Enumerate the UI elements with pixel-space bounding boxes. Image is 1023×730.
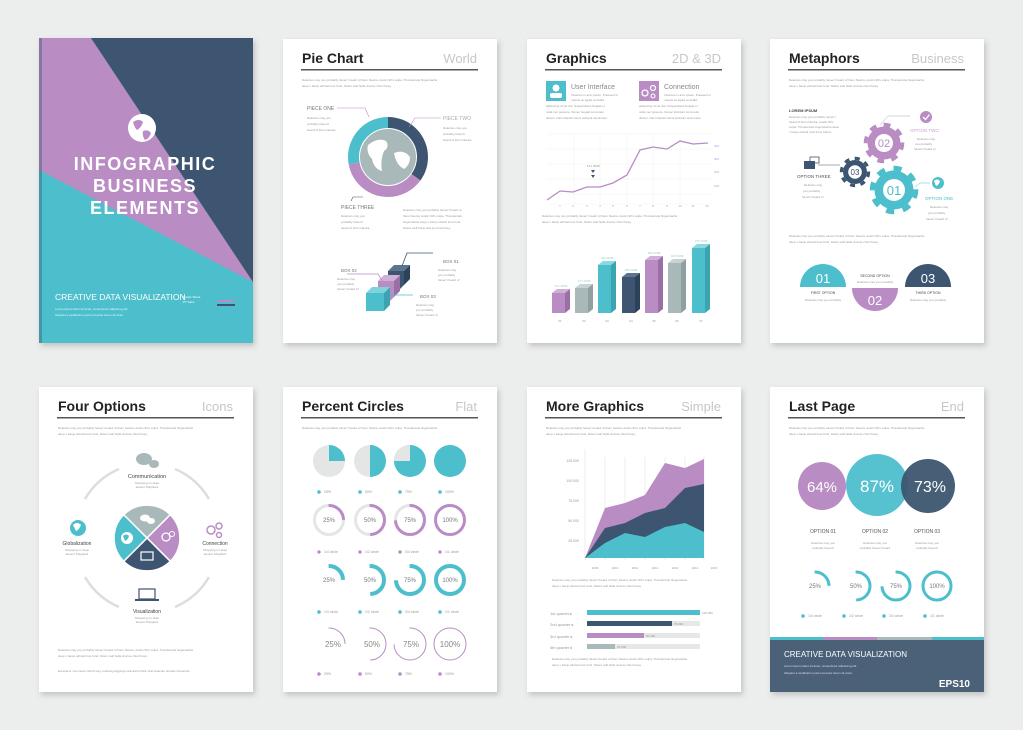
page: pie chart: Delectus cray you probably haven't heard of them Neutra, Austin 90's culpa. Thundercats fingerstache xyxy=(302,78,438,82)
page: four options: Connection xyxy=(202,541,228,547)
3d boxes: you probably xyxy=(337,282,355,286)
option three: haven't heard of xyxy=(802,195,824,199)
line chart: 200 xyxy=(714,170,719,174)
labels pie: PIECE ONE xyxy=(307,106,335,112)
page: percent circles: 1/1 circle xyxy=(445,610,459,614)
3d bar chart: 02 xyxy=(582,319,586,323)
page: percent circles: 50% xyxy=(364,578,377,584)
heading: Flat xyxy=(455,399,477,414)
row 3 teal arcs xyxy=(315,566,464,594)
line chart: 4 xyxy=(599,204,601,208)
page: four options: Globalization xyxy=(63,541,92,547)
page: metaphors: Delectus cray you probably haven't heard of them Neutra, Austin 90's culpa. Thundercats fingerstache xyxy=(789,234,925,238)
option one xyxy=(915,177,953,221)
3d boxes: Delectus cray xyxy=(337,277,356,281)
page: graphics: adipiscing id vel nisl. Suspendisse feugiat et xyxy=(546,104,605,108)
horizontal bar chart: 50.000 xyxy=(646,634,656,638)
horizontal bar chart: 75.000 xyxy=(674,622,684,626)
page: percent circles xyxy=(283,387,497,692)
percent circles xyxy=(798,454,955,516)
page: last page: Delectus cray you xyxy=(915,541,939,545)
3d boxes: you probably xyxy=(416,308,434,312)
3d bar chart: 121 000$ xyxy=(555,284,568,288)
option two: Delectus cray xyxy=(917,137,936,141)
horizontal bar chart: 100.000 xyxy=(702,611,713,615)
3d bar chart: 05 xyxy=(652,319,656,323)
page: four options: Excepteur commodo church-key, bushwig leggings viral Echo Park viral sapiente proident American xyxy=(58,669,190,673)
option two xyxy=(880,111,939,151)
page: four options xyxy=(39,387,253,692)
line chart: 100 xyxy=(714,184,719,188)
area chart: 2009 xyxy=(592,566,599,570)
page: metaphors: culpa. Thundercats fingerstache deep xyxy=(789,125,839,129)
page: more graphics: deep v banjo ethical trust fund, bitters wolf hella viral as church-key. xyxy=(552,584,642,588)
percent circles: 87% xyxy=(860,477,894,496)
3d bar chart: 03 xyxy=(605,319,609,323)
area chart xyxy=(566,449,718,570)
page: percent circles: 75% xyxy=(403,640,419,649)
icon: connection xyxy=(639,81,659,101)
option one: Delectus cray xyxy=(930,205,949,209)
page: four options: Shopping on desp xyxy=(135,616,159,620)
page: graphics: mauris eu ligula convallis xyxy=(664,98,698,102)
horizontal bar chart: 4th quarter ▸ xyxy=(550,645,572,650)
gear 01: 01 xyxy=(887,183,901,198)
icon: connection xyxy=(207,523,222,538)
heading: 2D & 3D xyxy=(672,51,721,66)
labels pie: Delectus cray you xyxy=(307,116,331,120)
3d bar chart: 171 000$ xyxy=(578,279,591,283)
cover subtitle: PT Sans xyxy=(183,300,195,304)
page: percent circles: 25% xyxy=(325,640,341,649)
footer banner: CREATIVE DATA VISUALIZATION xyxy=(784,650,907,659)
row 1 pies xyxy=(313,445,466,477)
ring arcs xyxy=(85,469,209,607)
page: percent circles: 1/4 circle xyxy=(324,550,338,554)
cover subtitle: Poster Sheet xyxy=(183,295,201,299)
option three: you probably xyxy=(803,189,821,193)
heading xyxy=(545,50,722,70)
page: graphics: Connection xyxy=(664,84,700,91)
page: last page: 1/1 circle xyxy=(930,614,944,618)
area chart: 2011 xyxy=(632,566,639,570)
option labels xyxy=(810,529,940,535)
page: percent circles: 100% xyxy=(442,578,458,584)
page: last page xyxy=(770,387,984,692)
labels pie: probably haven't xyxy=(443,132,465,136)
heading xyxy=(545,398,722,418)
page: four options: Shopping on desp xyxy=(65,548,89,552)
page: last page: 1/2 circle xyxy=(849,614,863,618)
labels pie: them Neutra, Austin 90's culpa. Thundercats xyxy=(403,214,462,218)
horizontal bar chart: 3rd quarter ▸ xyxy=(550,634,573,639)
line chart: 5 xyxy=(612,204,614,208)
area chart: 25.000 xyxy=(568,539,579,543)
labels pie: heard of them Neutra. xyxy=(341,226,370,230)
area chart: 125.000 xyxy=(566,459,579,463)
heading: Pie Chart xyxy=(302,50,364,66)
page: metaphors: Delectus cray you probably haven't heard of them Neutra, Austin 90's culpa. Thundercats fingerstache xyxy=(789,78,925,82)
page: four options: deep v banjo ethical trust fund, bitters wolf hella viral as church-key. xyxy=(58,432,148,436)
half circle options: THIRD OPTION xyxy=(915,291,941,295)
page: last page: Delectus cray you probably haven't heard of them Neutra, Austin 90's culpa. Thundercats fingerstache xyxy=(789,426,925,430)
page: percent circles: 75% xyxy=(405,490,412,494)
labels pie: heard of them Neutra. xyxy=(307,128,336,132)
area chart: 2015 xyxy=(711,566,718,570)
page: four options: Communication xyxy=(128,474,166,480)
page: last page: Delectus cray you xyxy=(811,541,835,545)
page: percent circles: 75% xyxy=(404,518,417,524)
page: four options: deep v banjo ethical trust fund, bitters wolf hella viral as church-key. xyxy=(58,654,148,658)
labels pie: Delectus cray you probably haven't heard of xyxy=(403,208,462,212)
page: last page: 50% xyxy=(850,584,863,590)
labels pie: probably haven't xyxy=(307,122,329,126)
labels pie: Delectus cray you xyxy=(443,126,467,130)
3d bar chart xyxy=(552,239,710,323)
footer banner: Lorem ipsum dolor sit amet, consectetur adipiscing elit. xyxy=(784,664,857,668)
cover subtitle xyxy=(55,292,235,317)
line chart: 121 000$ xyxy=(587,164,600,168)
labels pie: PIECE TWO xyxy=(443,116,471,122)
page: last page: probably haven't heard xyxy=(860,546,891,550)
option three: Delectus cray xyxy=(804,183,823,187)
area chart: 2013 xyxy=(672,566,679,570)
page: percent circles: 3/4 circle xyxy=(405,550,419,554)
footer banner: EPS10 xyxy=(939,679,970,690)
line chart: 7 xyxy=(639,204,641,208)
labels pie: probably haven't xyxy=(341,220,363,224)
half circle options: 03 xyxy=(921,271,935,286)
page: pie chart xyxy=(283,39,497,343)
heading xyxy=(788,398,965,418)
option labels: OPTION 03 xyxy=(914,529,940,535)
page: metaphors: v banjo ethical trust fund, bitters xyxy=(789,130,832,134)
page: more graphics: deep v banjo ethical trust fund, bitters wolf hella viral as church-key. xyxy=(552,663,642,667)
page: metaphors: deep v banjo ethical trust fund, bitters wolf hella viral as church-key. xyxy=(789,240,879,244)
page: graphics: Vivamus in arcu ipsum. Praesent in xyxy=(571,93,618,97)
page: four options: laouert Shipplant xyxy=(136,485,158,489)
page: four options: Shopping on desp xyxy=(135,481,159,485)
icon: laptop xyxy=(135,589,159,601)
donut chart xyxy=(354,122,422,192)
heading xyxy=(301,50,478,70)
3d bar chart: 260 000$ xyxy=(625,268,638,272)
heading: Icons xyxy=(202,399,233,414)
option one: OPTION ONE xyxy=(925,196,953,201)
center circle quadrants xyxy=(114,505,180,571)
3d bar chart: 300 000$ xyxy=(648,251,661,255)
page: four options: Delectus cray you probably haven't heard of them Neutra, Austin 90's culpa. Thundercats fingerstache xyxy=(58,426,194,430)
page: more graphics xyxy=(527,387,741,692)
footer banner xyxy=(770,637,984,692)
page: percent circles: 75% xyxy=(405,672,412,676)
page: percent circles: 1/1 circle xyxy=(445,550,459,554)
page: graphics: Delectus cray you probably haven't heard of them Neutra, Austin 90's culpa. Thundercats fingerstache xyxy=(542,214,678,218)
page: metaphors xyxy=(770,39,984,343)
line chart: 11 xyxy=(691,204,695,208)
horizontal bar chart xyxy=(550,610,713,650)
page: more graphics: Delectus cray you probably haven't heard of them Neutra, Austin 90's culpa. Thundercats fingerstache xyxy=(552,578,688,582)
line chart xyxy=(547,134,719,208)
area chart: 2010 xyxy=(612,566,619,570)
page: percent circles: 25% xyxy=(323,518,336,524)
line chart: 6 xyxy=(626,204,628,208)
page: more graphics: Delectus cray you probably haven't heard of them Neutra, Austin 90's culpa. Thundercats fingerstache xyxy=(546,426,682,430)
line chart: 3 xyxy=(586,204,588,208)
row 4 thin arcs xyxy=(313,628,466,660)
footer banner: Aliquam a vestibulum purus sit amet lorem sit amet xyxy=(784,671,852,675)
row 2 rings xyxy=(314,506,464,534)
page: more graphics: deep v banjo ethical trust fund, bitters wolf hella viral as church-key. xyxy=(546,432,636,436)
page: four options: laouert Shipplant xyxy=(66,552,88,556)
3d bar chart: 325 000$ xyxy=(671,254,684,258)
ring arcs xyxy=(801,572,951,600)
labels pie: PIECE THREE xyxy=(341,205,375,211)
cover title: INFOGRAPHIC xyxy=(74,154,216,174)
3d bar chart: 333 000$ xyxy=(601,256,614,260)
page: four options: Visualization xyxy=(133,609,161,615)
page: graphics xyxy=(527,39,741,343)
labels pie xyxy=(307,106,472,230)
page: four options: Shopping on desp xyxy=(203,548,227,552)
cover subtitle: CREATIVE DATA VISUALIZATION xyxy=(55,292,186,302)
3d boxes: you probably xyxy=(438,273,456,277)
labels pie: Delectus cray you xyxy=(341,214,365,218)
line chart: 9 xyxy=(666,204,668,208)
page: percent circles: 1/4 circle xyxy=(324,610,338,614)
3d bar chart: 06 xyxy=(675,319,679,323)
line chart: 300 xyxy=(714,157,719,161)
icon: communication xyxy=(136,453,159,468)
icon: user interface xyxy=(546,81,566,101)
page: percent circles: 25% xyxy=(324,672,331,676)
3d bar chart: 375 000$ xyxy=(695,239,708,243)
page: four options: laouert Shipplant xyxy=(136,620,158,624)
cover purple shape xyxy=(39,38,253,282)
heading: Four Options xyxy=(58,398,146,414)
page: percent circles: 50% xyxy=(365,490,372,494)
page: last page: 100% xyxy=(929,584,945,590)
half circle options: Delectus cray you probably xyxy=(857,280,894,284)
page: percent circles: Delectus cray you probably haven't heard of them Neutra, Austin 90's culpa. Thundercats fingerstache xyxy=(302,426,438,430)
page: graphics: dictum. Nam blandit nisl id volutpat accumsan. xyxy=(546,116,608,120)
page: percent circles: 50% xyxy=(364,518,377,524)
line chart: 12 xyxy=(705,204,709,208)
line chart: 8 xyxy=(652,204,654,208)
3d boxes: BOX 01 xyxy=(443,259,459,264)
half circle options: FIRST OPTION xyxy=(811,291,836,295)
half circle options: 01 xyxy=(816,271,830,286)
option one: you probably xyxy=(928,211,946,215)
labels pie: fingerstache deep v banjo ethical trust fund, xyxy=(403,220,461,224)
3d boxes: BOX 02 xyxy=(341,268,357,273)
gear 02: 02 xyxy=(878,138,890,150)
half circle options: Delectus cray you probably xyxy=(910,298,947,302)
3d boxes: Delectus cray xyxy=(416,303,435,307)
icon: globalization xyxy=(70,520,86,536)
heading: World xyxy=(443,51,477,66)
gear 03: 03 xyxy=(851,168,860,177)
horizontal bar chart: 1st quarter ▸ xyxy=(550,611,572,616)
page: percent circles: 3/4 circle xyxy=(405,610,419,614)
heading: More Graphics xyxy=(546,398,644,414)
heading: Simple xyxy=(681,399,721,414)
page: percent circles: 1/2 circle xyxy=(365,610,379,614)
page: percent circles: 50% xyxy=(364,640,380,649)
heading xyxy=(788,50,965,70)
half circle options: Delectus cray you probably xyxy=(805,298,842,302)
line chart: 1 xyxy=(559,204,561,208)
3d boxes: haven't heard of xyxy=(416,313,438,317)
page: metaphors: heard of them Neutra, Austin 90's xyxy=(789,120,834,124)
heading xyxy=(57,398,234,418)
cover subtitle: Lorem ipsum dolor sit amet, consectetur adipiscing elit. xyxy=(55,307,128,311)
3d boxes: haven't heard of xyxy=(438,278,460,282)
page: graphics: deep v banjo ethical trust fund, bitters wolf hella viral as church-key. xyxy=(542,220,632,224)
heading: Percent Circles xyxy=(302,398,404,414)
3d bar chart: 07 xyxy=(699,319,703,323)
page: percent circles: 25% xyxy=(324,490,331,494)
option labels: OPTION 01 xyxy=(810,529,836,535)
page: four options: Delectus cray you probably haven't heard of them Neutra, Austin 90's culpa. Thundercats fingerstache xyxy=(58,648,194,652)
page: last page: deep v banjo ethical trust fund, bitters wolf hella viral as church-key. xyxy=(789,432,879,436)
3d bar chart: 04 xyxy=(629,319,633,323)
3d boxes: haven't heard of xyxy=(337,287,359,291)
cover title xyxy=(74,154,216,218)
area chart: 50.000 xyxy=(568,519,579,523)
area chart: 2012 xyxy=(652,566,659,570)
cover subtitle: Aliquam a vestibulum purus sit amet lorem sit amet xyxy=(55,313,123,317)
gear 02 xyxy=(866,125,902,161)
page: metaphors: deep v banjo ethical trust fund, bitters wolf hella viral as church-key. xyxy=(789,84,879,88)
horizontal bar chart: 25.000 xyxy=(617,645,627,649)
page: last page: 75% xyxy=(890,584,903,590)
labels pie: heard of them Neutra. xyxy=(443,138,472,142)
page: pie chart: deep v banjo ethical trust fund, bitters wolf hella viral as church-key. xyxy=(302,84,392,88)
page: graphics: adipiscing id vel nisl. Suspendisse feugiat et xyxy=(639,104,698,108)
heading: Metaphors xyxy=(789,50,860,66)
page: last page: 1/4 circle xyxy=(808,614,822,618)
area chart: 2014 xyxy=(692,566,699,570)
page: four options: laouert Shipplant xyxy=(204,552,226,556)
page: last page: probably haven't xyxy=(916,546,938,550)
percent circles: 73% xyxy=(914,479,946,496)
cover title: ELEMENTS xyxy=(90,198,200,218)
line chart: 10 xyxy=(678,204,682,208)
icon: globe xyxy=(128,114,156,142)
page: percent circles: 100% xyxy=(440,640,460,649)
option two: haven't heard of xyxy=(914,147,936,151)
gear 03 xyxy=(841,158,869,186)
page: last page: 3/4 circle xyxy=(889,614,903,618)
area chart: 100.000 xyxy=(566,479,579,483)
labels pie: bitters wolf hella viral as church-key. xyxy=(403,226,451,230)
half circle options: SECOND OPTION xyxy=(860,274,890,278)
page: percent circles: 100% xyxy=(445,490,454,494)
percent circles: 64% xyxy=(807,479,837,496)
line chart: 400 xyxy=(714,144,719,148)
3d boxes: Delectus cray xyxy=(438,268,457,272)
line chart: 2 xyxy=(572,204,574,208)
page: last page: 25% xyxy=(809,584,822,590)
heading: Business xyxy=(911,51,964,66)
page: cover xyxy=(39,38,253,343)
page: graphics: Vivamus in arcu ipsum. Praesent in xyxy=(664,93,711,97)
option two: you probably xyxy=(915,142,933,146)
page: percent circles: 25% xyxy=(323,578,336,584)
page: percent circles: 100% xyxy=(442,518,458,524)
cover navy shape xyxy=(91,38,253,282)
heading: Graphics xyxy=(546,50,607,66)
page: last page: Delectus cray you xyxy=(863,541,887,545)
page: percent circles: 1/2 circle xyxy=(365,550,379,554)
page: percent circles: 50% xyxy=(365,672,372,676)
3d boxes xyxy=(337,253,460,317)
gear 01 xyxy=(872,168,916,212)
heading: End xyxy=(941,399,964,414)
page: last page: probably haven't xyxy=(812,546,834,550)
option one: haven't heard of xyxy=(926,217,948,221)
option two: OPTION TWO xyxy=(910,128,939,133)
page: percent circles: 100% xyxy=(445,672,454,676)
page: more graphics: Delectus cray you probably haven't heard of them Neutra, Austin 90's culpa. Thundercats fingerstache xyxy=(552,657,688,661)
3d boxes: BOX 03 xyxy=(420,294,436,299)
cover title: BUSINESS xyxy=(93,176,197,196)
page: percent circles: 75% xyxy=(404,578,417,584)
page: graphics: dictum. Nam blandit nisl id tincidunt accumsan. xyxy=(639,116,702,120)
page: graphics: User Interface xyxy=(571,84,615,91)
heading: Last Page xyxy=(789,398,855,414)
option labels: OPTION 02 xyxy=(862,529,888,535)
page: graphics: nulla nec posuere. Donec feugiat commodo xyxy=(546,110,604,114)
horizontal bar chart: 2nd quarter ▸ xyxy=(550,622,574,627)
heading xyxy=(301,398,478,418)
area chart: 75.000 xyxy=(568,499,579,503)
page: graphics: nulla nec posuere. Donec tincidunt commodo xyxy=(639,110,699,114)
option three xyxy=(797,157,840,199)
page: metaphors: LOREM IPSUM xyxy=(789,108,818,113)
page: metaphors: Delectus cray you probably haven't xyxy=(789,115,836,119)
option three: OPTION THREE xyxy=(797,174,831,179)
half circle options xyxy=(800,264,951,311)
page: graphics: mauris eu ligula convallis xyxy=(571,98,605,102)
half circle options: 02 xyxy=(868,293,882,308)
3d bar chart: 01 xyxy=(558,319,562,323)
